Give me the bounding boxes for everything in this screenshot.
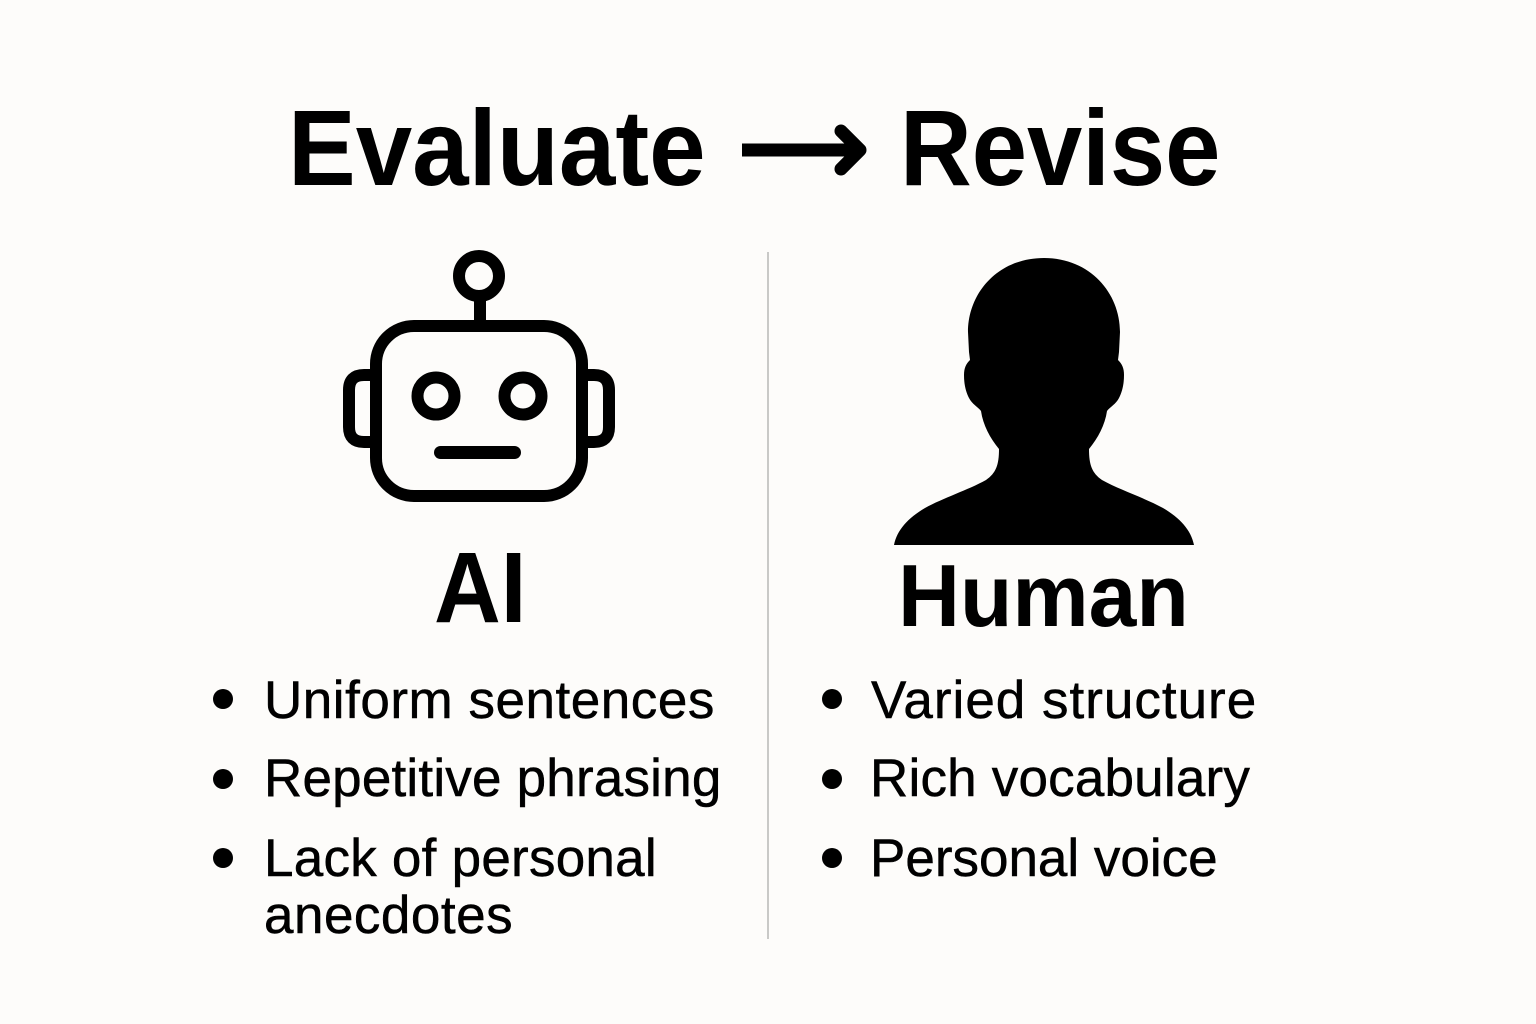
bullet: Uniform sentences: Uniform sentences: [264, 671, 715, 730]
bullet: Lack of personal anecdotes: [213, 829, 657, 945]
bullet: Repetitive phrasing: Repetitive phrasing: [264, 749, 722, 808]
arrow: [742, 131, 860, 169]
title: Revise: [900, 87, 1220, 208]
title: [288, 87, 1220, 208]
list: AI traits: [213, 671, 722, 945]
heading: AI: AI: [434, 532, 526, 644]
title: Evaluate: [288, 87, 706, 208]
divider: [767, 252, 769, 939]
bullet: Lack of personal anecdotes: Lack of personal: [264, 829, 657, 888]
icon: human silhouette: [894, 258, 1194, 545]
bullet: Rich vocabulary: Rich vocabulary: [870, 749, 1250, 808]
list: Human traits: [822, 671, 1257, 888]
heading: Human: Human: [898, 546, 1189, 645]
icon: robot: [349, 256, 609, 496]
bullet: Varied structure: Varied structure: [871, 671, 1257, 730]
bullet: Lack of personal anecdotes: anecdotes: [264, 886, 513, 945]
bullet: Personal voice: Personal voice: [870, 829, 1218, 888]
